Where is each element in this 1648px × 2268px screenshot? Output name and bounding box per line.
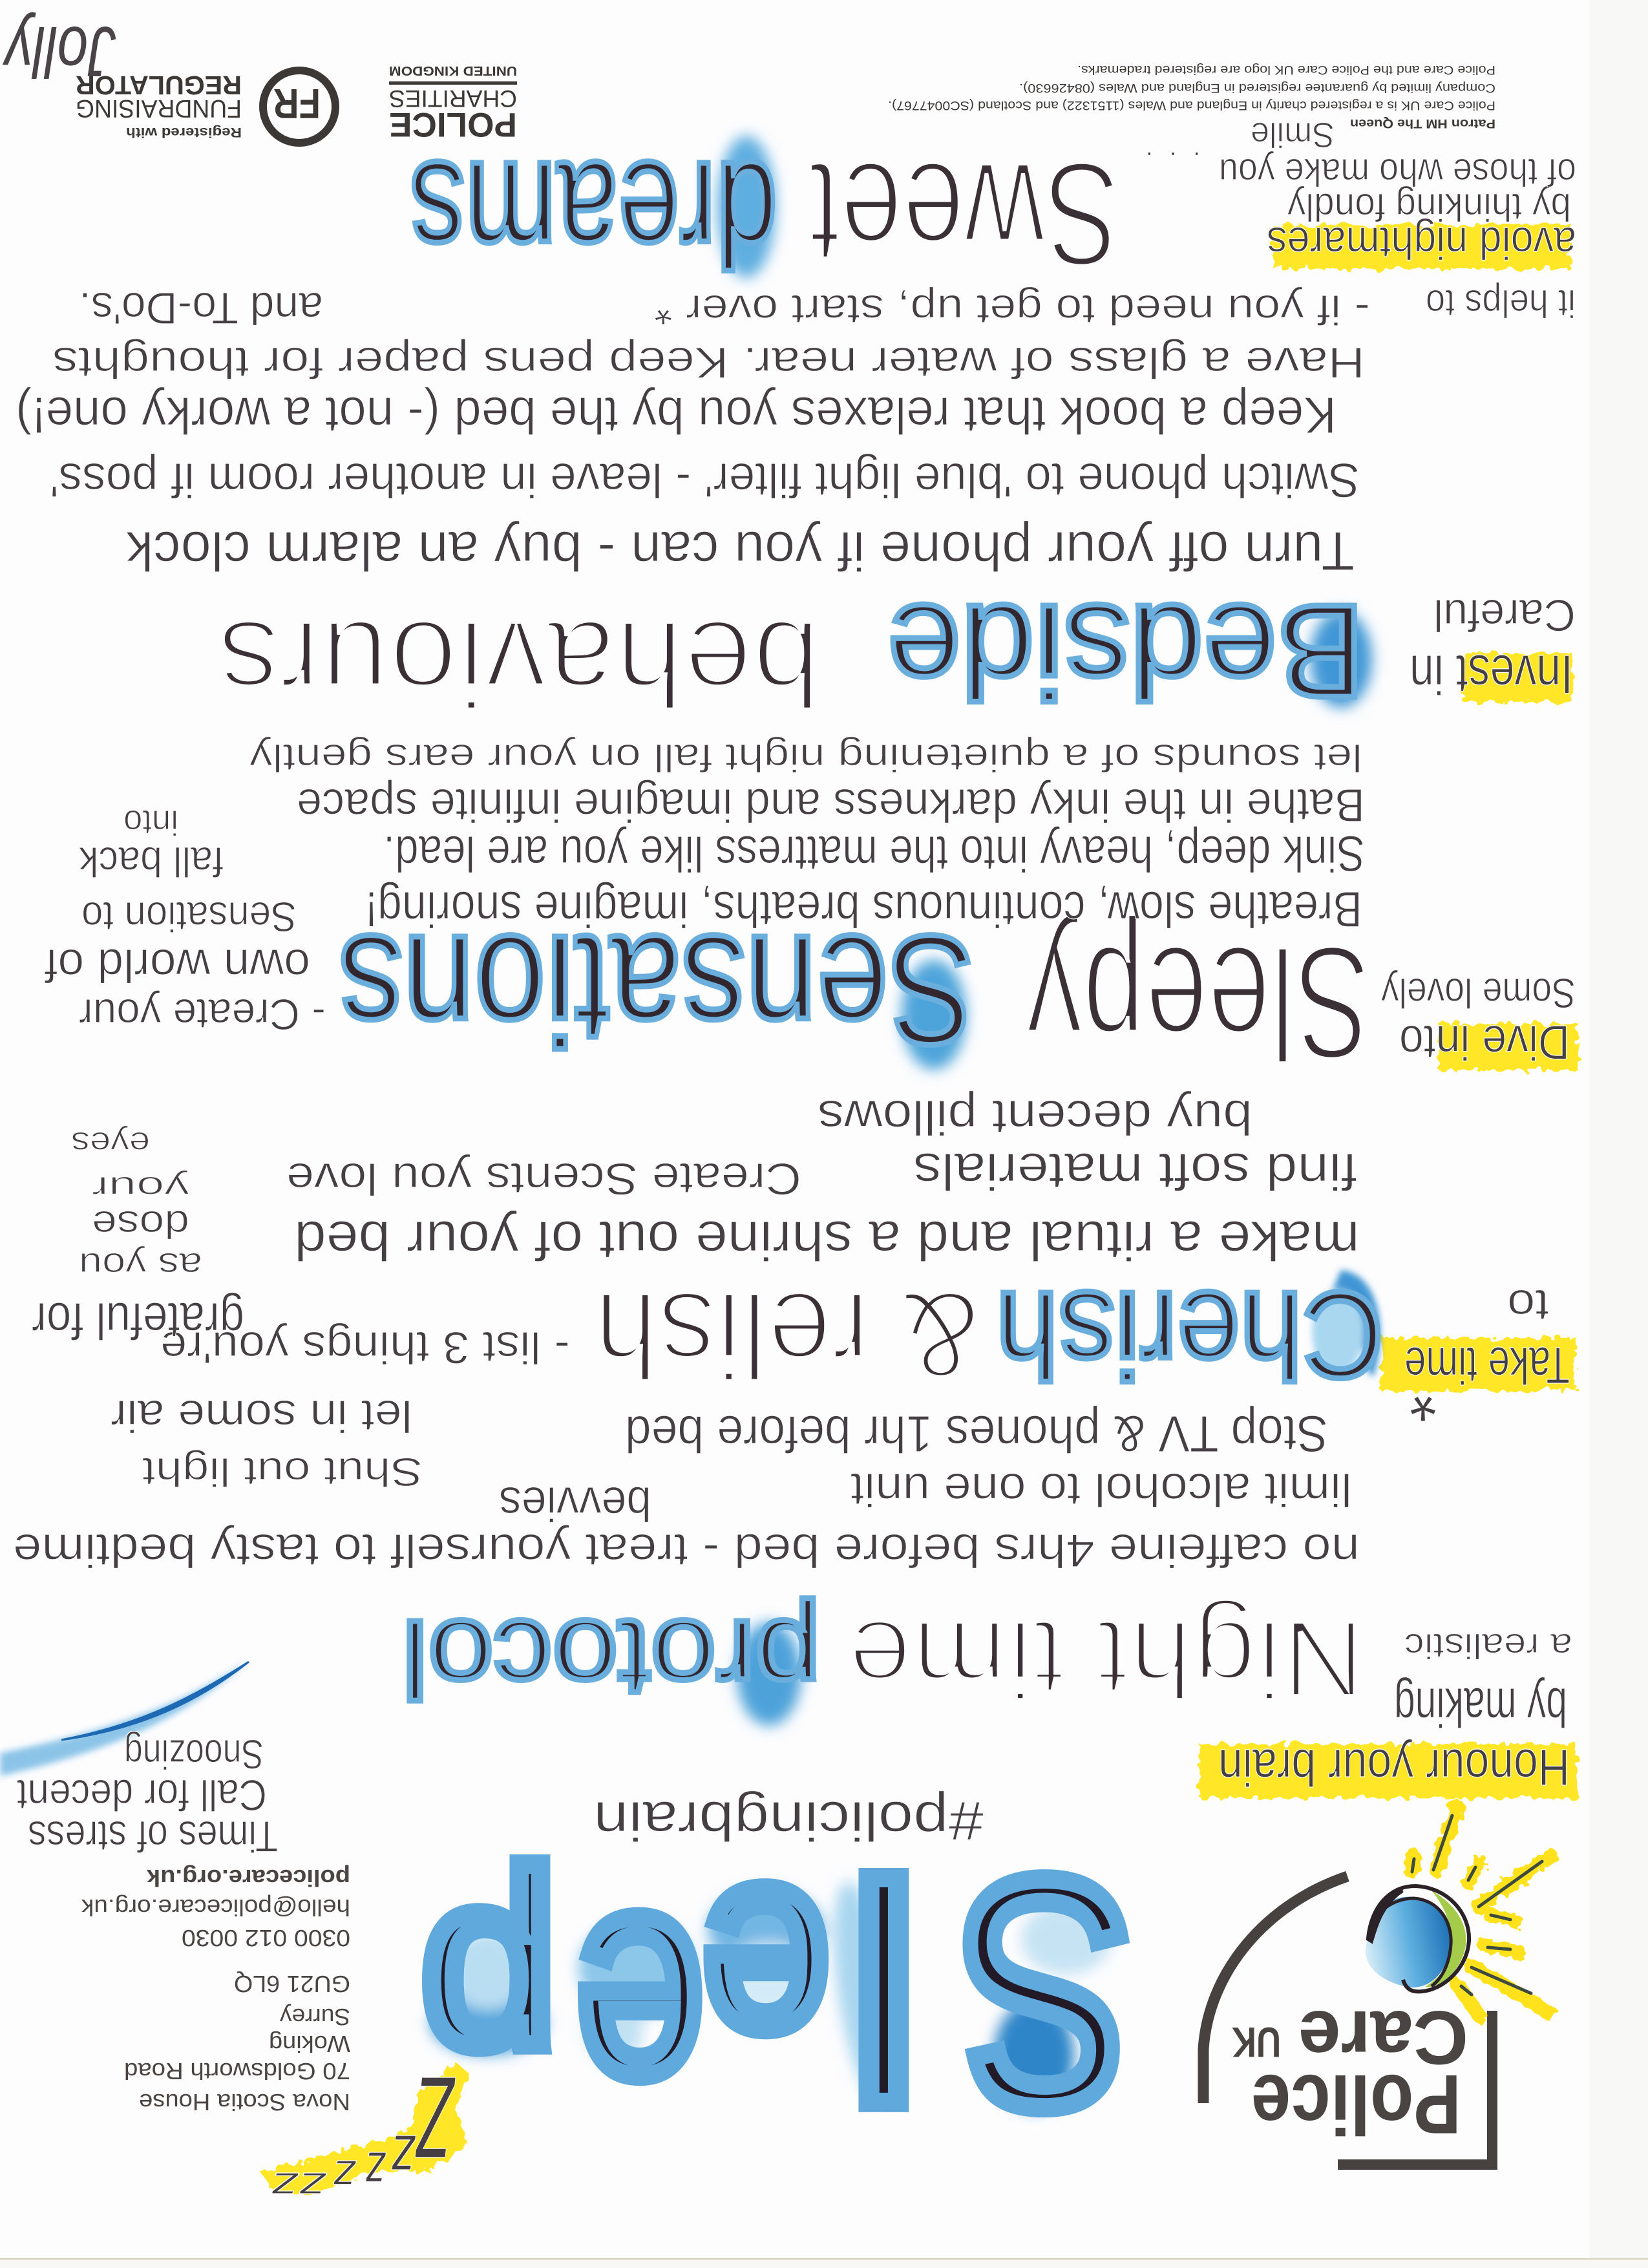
paragraph: breathe slow: Breathe slow, continuous breaths, imagine snoring!	[365, 881, 1362, 938]
section: sleepy sensations	[44, 736, 1578, 1093]
Zzzzz lettering: zz	[271, 2165, 327, 2208]
side note: by making a realistic: a realistic	[1404, 1626, 1572, 1666]
legal text: Patron HM The Queen	[1350, 116, 1495, 130]
Zzzzz lettering	[271, 2052, 456, 2208]
heading: sweet dreams: ...	[1137, 134, 1209, 214]
address block	[81, 1865, 350, 2115]
logo: Fundraising Regulator	[76, 70, 335, 143]
Zzzzz lettering: Z	[415, 2052, 456, 2182]
title letter l: l	[847, 1812, 921, 2159]
paragraph: breathe slow	[249, 736, 1365, 938]
icon: asterisk: *	[1410, 1357, 1437, 1436]
note: create your own world: Sensation to	[81, 893, 297, 940]
paragraph: breathe slow: let sounds of a quietening night fall on your ears gently	[249, 736, 1362, 779]
bullet: let in some air: let in some air	[111, 1391, 412, 1441]
heading: sweet dreams: Sweet	[809, 131, 1119, 297]
note: create your own world	[44, 803, 326, 1039]
heading: sweet dreams	[410, 131, 1209, 297]
bullet: no caffeine: no caffeine 4hrs before bed - treat yourself to tasty bedtime	[13, 1524, 1360, 1576]
bullet: turn off your phone: Turn off your phone if you can - buy an alarm clock	[126, 520, 1355, 581]
note: think fondly of those who make you smile: by thinking fondly	[1287, 185, 1571, 229]
Zzzzz lettering: z	[365, 2140, 386, 2201]
Zzzzz lettering: z	[333, 2151, 357, 2201]
heading: night time protocol: Night time	[848, 1597, 1365, 1720]
address block: policecare.org.uk	[146, 1865, 350, 1891]
address block: GU21 6LQ	[234, 1971, 350, 1997]
bullet: bevvies: bevvies	[499, 1477, 651, 1531]
highlight: dive into: Dive into	[1399, 1015, 1570, 1070]
section: bedside behaviours	[16, 282, 1576, 732]
section: sweet dreams	[410, 115, 1576, 297]
logo wordmark UK: UK	[1232, 2019, 1281, 2066]
FR roundel	[263, 70, 335, 143]
note: list 3 things: dose	[92, 1203, 189, 1246]
bullet: limit alcohol: limit alcohol to one unit	[850, 1463, 1352, 1515]
bullet: glass of water and pens: Have a glass of water near. Keep pens paper for thoughts	[52, 338, 1365, 387]
note: list 3 things: - list 3 things you're	[160, 1322, 570, 1373]
logo: Fundraising Regulator: FUNDRAISING	[76, 94, 242, 122]
note: create your own world: own world of	[44, 939, 310, 991]
logo arc	[1203, 1876, 1347, 2103]
heading: bedside behaviours	[218, 577, 1372, 732]
legal text: Company limited by guarantee registered in England and Wales (08426630).	[1019, 81, 1495, 94]
logo wordmark Care: Care	[1298, 1995, 1468, 2080]
highlight: take time: Take time	[1404, 1337, 1570, 1394]
side note: by making a realistic: by making	[1394, 1676, 1567, 1737]
note: think fondly of those who make you smile	[1219, 115, 1576, 229]
heading: sweet dreams: dreams	[410, 131, 777, 297]
highlight: invest in: Invest in	[1410, 643, 1573, 705]
heading: sleepy sensations: Sleepy	[1026, 913, 1370, 1093]
logo: Fundraising Regulator: REGULATOR	[76, 70, 242, 100]
legal text: Police Care and the Police Care UK logo are registered trademarks.	[1077, 63, 1495, 76]
address block: 70 Goldsworth Road	[124, 2058, 350, 2084]
hashtag: #policingbrain	[593, 1790, 984, 1851]
legal text: Police Care UK is a registered charity in England and Wales (1151322) and Scotland (SC0047767).	[888, 98, 1495, 112]
side note: it helps to: it helps to	[1426, 282, 1576, 325]
side note: careful: Careful	[1433, 590, 1576, 641]
bullet: switch phone: Switch phone to 'blue light filter' - leave in another room if poss'	[50, 453, 1360, 507]
note: list 3 things: eyes	[71, 1125, 150, 1161]
logo: Police Charities: POLICE	[389, 105, 517, 143]
address block: hello@policecare.org.uk	[81, 1894, 350, 1921]
title letter p: p	[421, 1861, 557, 2137]
note: list 3 things	[32, 1125, 570, 1373]
blue swoosh	[0, 1660, 249, 1776]
heading: cherish and relish: Cherish	[996, 1266, 1384, 1403]
note: list 3 things: as you	[79, 1245, 202, 1286]
bullet: create scents: Create Scents you love	[286, 1154, 801, 1204]
note: list 3 things: grateful for	[32, 1292, 244, 1350]
heading: sleepy sensations: Sensations	[339, 904, 974, 1077]
title: Sleep	[421, 1812, 1132, 2182]
yellow highlight behind Zzzzz	[262, 2063, 469, 2194]
heading: sleepy sensations	[339, 904, 1370, 1093]
icon: moon	[1366, 1886, 1469, 1991]
note: create your own world: into	[123, 803, 178, 843]
side note: times of stress: Snoozing	[124, 1731, 264, 1777]
logo wordmark Police: Police	[1251, 2057, 1461, 2152]
address block: Woking	[269, 2031, 350, 2057]
side note: some lovely: Some lovely	[1381, 970, 1576, 1017]
address block: 0300 012 0030	[182, 1925, 350, 1951]
bullet: make a ritual: make a ritual and a shrine out of your bed	[294, 1209, 1360, 1271]
note: think fondly of those who make you smile: of those who make you	[1219, 151, 1576, 194]
bullet: shut out light: Shut out light	[142, 1449, 423, 1494]
address block: Nova Scotia House	[139, 2089, 350, 2115]
FR roundel: FR	[273, 80, 321, 127]
section: cherish and relish	[32, 1090, 1576, 1403]
address block: Surrey	[280, 2004, 350, 2030]
paragraph: breathe slow: Bathe in the inky darkness and imagine infinite space	[297, 779, 1365, 831]
note: create your own world: - Create your	[79, 990, 326, 1039]
side note: by making a realistic	[1394, 1626, 1572, 1737]
icon: sun rays	[1411, 1807, 1551, 2017]
heading: night time protocol	[402, 1597, 1365, 1726]
heading: bedside behaviours: behaviours	[218, 595, 821, 732]
blue pencil shading behind title	[430, 1878, 1112, 2110]
Zzzzz lettering: z	[391, 2121, 416, 2194]
logo: Fundraising Regulator: Registered with	[126, 125, 242, 140]
heading: bedside behaviours: Bedside	[887, 577, 1365, 725]
bullet: stop tv and phones: Stop TV & phones 1hr before bed	[625, 1405, 1328, 1463]
note: and to-dos: and To-Do's.	[79, 283, 323, 334]
bullet: find soft materials: find soft materials	[913, 1143, 1357, 1200]
doodle: Zzzzz	[262, 2052, 469, 2208]
side note: to: to	[1507, 1280, 1549, 1331]
heading: cherish and relish: & relish	[594, 1266, 979, 1403]
paragraph: breathe slow: Sink deep, heavy into the mattress like you are lead.	[383, 825, 1365, 882]
heading: night time protocol: protocol	[402, 1597, 821, 1720]
logo frame	[1338, 2011, 1492, 2165]
bullet: if you need to get up: - if you need to get up, start over *	[654, 286, 1370, 334]
legal text	[888, 63, 1495, 130]
logo: Police Charities: CHARITIES	[389, 85, 517, 112]
logo: Police Charities: UNITED KINGDOM	[389, 63, 517, 78]
note: create your own world: fall back	[79, 838, 224, 885]
title letter e: e	[575, 1858, 704, 2182]
highlight: honour your brain: Honour your brain	[1218, 1739, 1570, 1796]
highlight: avoid nightmares: avoid nightmares	[1267, 218, 1576, 268]
note: list 3 things: your	[92, 1170, 189, 1206]
bullet: buy decent pillows: buy decent pillows	[818, 1090, 1252, 1145]
logo: Police Care UK	[1203, 1807, 1551, 2165]
title letter e: e	[702, 1836, 830, 2125]
logo: Police Charities	[389, 63, 517, 143]
title letter S: S	[958, 1814, 1132, 2175]
section: night time protocol	[13, 1357, 1577, 1798]
note: think fondly of those who make you smile: Smile	[1251, 115, 1335, 155]
side note: times of stress	[0, 1660, 278, 1861]
heading: cherish and relish	[594, 1266, 1384, 1403]
